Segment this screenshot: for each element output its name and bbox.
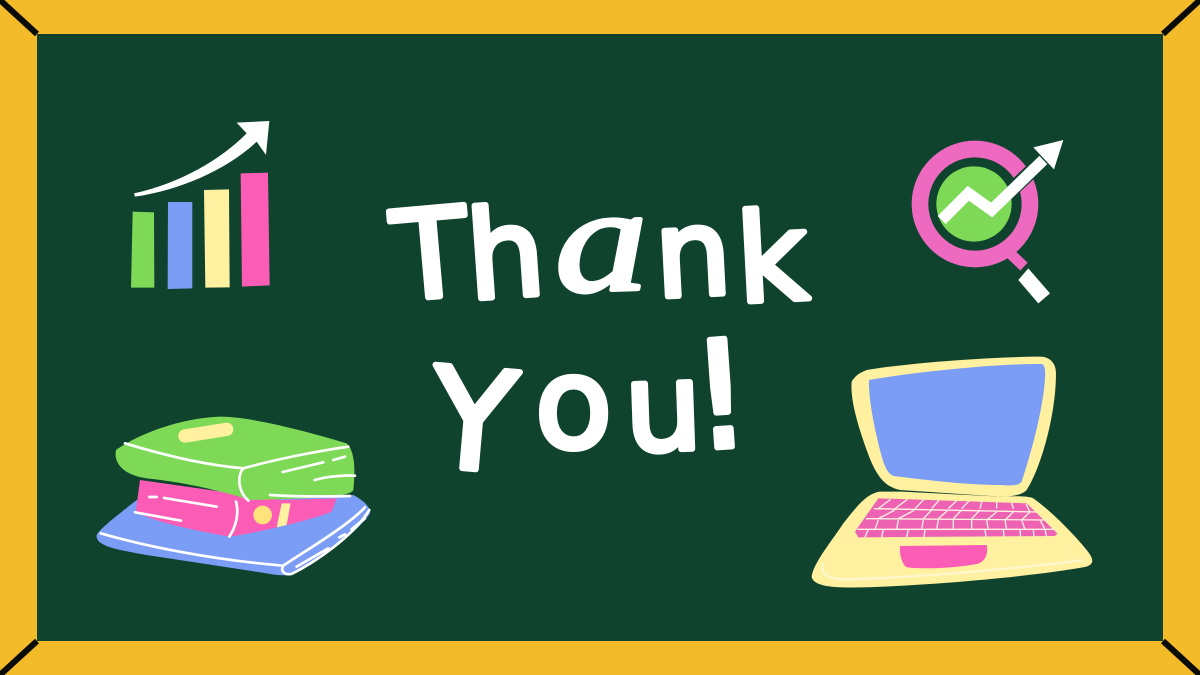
pink book [136,480,337,537]
title: Thank You!: n [651,183,734,326]
title: Thank You!: h [462,181,549,328]
title: Thank You!: Y [423,337,523,505]
icon: laptop [812,357,1092,588]
title: Thank You!: u [622,335,704,480]
green book [116,417,354,500]
title: Thank You!: a [551,155,651,325]
title: Thank You!: ! [685,308,757,484]
title: Thank You!: k [733,185,811,331]
title: Thank You!: o [535,330,612,477]
icon: stack of books [97,417,370,575]
title: Thank You!: T [386,181,474,329]
keyboard [855,498,1057,537]
icon: bar chart with rising arrow [131,121,270,289]
blue book [97,495,370,575]
laptop base [812,492,1092,588]
laptop screen [869,364,1045,485]
icon: magnifying glass with trend arrow [920,140,1063,303]
title: Thank You! [386,155,811,505]
blue book lines [101,507,369,574]
laptop screen frame [851,357,1056,497]
trackpad [900,545,987,568]
